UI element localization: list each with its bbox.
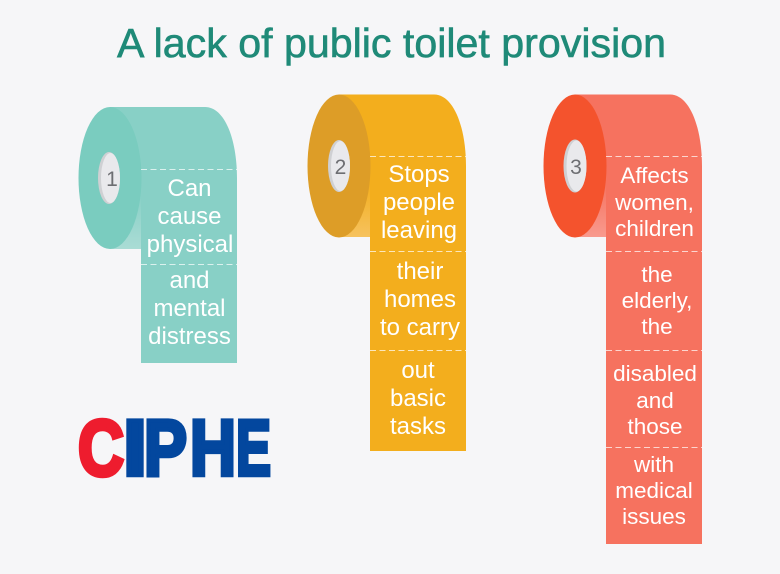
text: affects women, children, the elderly, the disabled and those with medical issues: women, bbox=[614, 190, 694, 215]
text: stops people leaving their homes to carry out basic tasks: their bbox=[397, 258, 443, 285]
text: stops people leaving their homes to carry out basic tasks: leaving bbox=[381, 217, 457, 244]
core 2 bbox=[328, 140, 350, 192]
text: affects women, children, the elderly, the disabled and those with medical issues bbox=[613, 163, 697, 529]
core 2: 2 bbox=[335, 156, 346, 179]
text: can cause physical and mental distress bbox=[147, 175, 233, 350]
roll 1: physical and mental distress bbox=[78, 107, 237, 363]
text: can cause physical and mental distress: mental bbox=[153, 295, 226, 322]
paper sheet 1 bbox=[110, 107, 237, 363]
roll end 1 bbox=[78, 107, 142, 249]
text: affects women, children, the elderly, the disabled and those with medical issues: with bbox=[633, 452, 674, 477]
text: can cause physical and mental distress: physical bbox=[147, 231, 233, 258]
roll 2: stops people leaving their homes bbox=[308, 94, 466, 451]
text: affects women, children, the elderly, the disabled and those with medical issues: Affects bbox=[620, 163, 689, 188]
text: affects women, children, the elderly, the disabled and those with medical issues: the bbox=[641, 262, 673, 287]
core 1 bbox=[98, 152, 120, 204]
inner shadow strip 1 bbox=[110, 195, 141, 249]
logo: CIPHE: H bbox=[190, 403, 236, 492]
logo: CIPHE: P bbox=[144, 403, 187, 492]
text: affects women, children, the elderly, the disabled and those with medical issues: children bbox=[615, 216, 694, 241]
text: affects women, children, the elderly, the disabled and those with medical issues: issues bbox=[622, 504, 686, 529]
paper sheet 3 bbox=[575, 94, 702, 544]
text: stops people leaving their homes to carry out basic tasks: Stops bbox=[388, 161, 450, 188]
core 3: 3 bbox=[570, 156, 582, 179]
text: can cause physical and mental distress: Can bbox=[167, 175, 212, 202]
inner shadow strip 2 bbox=[339, 183, 370, 237]
text: stops people leaving their homes to carry out basic tasks bbox=[380, 161, 460, 440]
text: stops people leaving their homes to carry out basic tasks: out bbox=[401, 357, 435, 384]
text: affects women, children, the elderly, the disabled and those with medical issues: elderly, bbox=[622, 288, 692, 313]
paper sheet 2 bbox=[339, 94, 466, 451]
text: affects women, children, the elderly, the disabled and those with medical issues: medical bbox=[615, 478, 693, 503]
core 3 bbox=[564, 140, 586, 192]
logo: CIPHE: C bbox=[78, 403, 124, 492]
logo: CIPHE bbox=[78, 403, 271, 492]
text: affects women, children, the elderly, the disabled and those with medical issues: the bbox=[641, 314, 673, 339]
roll end 2 bbox=[308, 94, 370, 238]
text: can cause physical and mental distress: cause bbox=[157, 203, 222, 230]
logo: CIPHE: I bbox=[123, 403, 147, 492]
title: A lack of public toilet provision bbox=[117, 20, 666, 66]
text: stops people leaving their homes to carry out basic tasks: people bbox=[383, 189, 455, 216]
text: stops people leaving their homes to carry out basic tasks: basic bbox=[390, 385, 446, 412]
text: stops people leaving their homes to carry out basic tasks: homes bbox=[384, 286, 456, 313]
logo: CIPHE: E bbox=[236, 403, 271, 492]
text: stops people leaving their homes to carry out basic tasks: to carry bbox=[380, 314, 460, 341]
inner shadow strip 3 bbox=[575, 183, 606, 237]
text: affects women, children, the elderly, the disabled and those with medical issues: and bbox=[636, 388, 674, 413]
text: affects women, children, the elderly, the disabled and those with medical issues: those bbox=[627, 414, 683, 439]
core 1: 1 bbox=[106, 168, 118, 191]
roll end 3 bbox=[544, 94, 606, 238]
text: affects women, children, the elderly, the disabled and those with medical issues: disabled bbox=[613, 361, 697, 386]
text: stops people leaving their homes to carry out basic tasks: tasks bbox=[390, 413, 446, 440]
text: can cause physical and mental distress: distress bbox=[148, 323, 231, 350]
text: can cause physical and mental distress: and bbox=[169, 267, 210, 294]
roll 3: affects women, children, elderly, disabled bbox=[544, 94, 702, 544]
